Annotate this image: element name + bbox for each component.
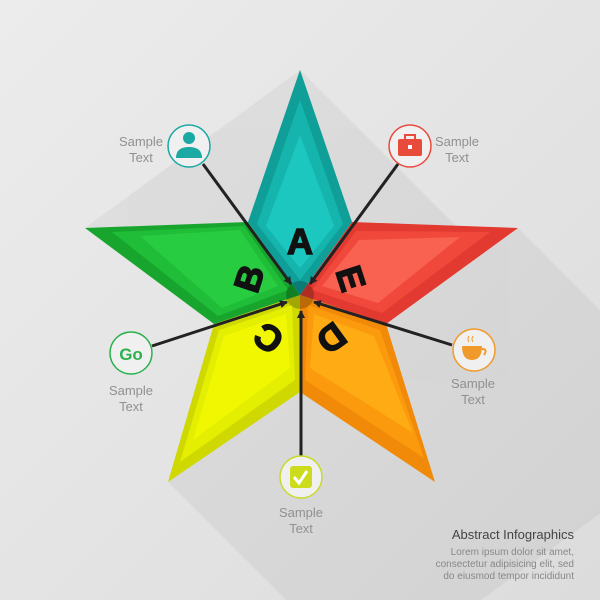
arrows [152,164,452,456]
labels: Sample [109,383,153,398]
icon: go: Go [119,345,143,364]
labels [109,134,495,536]
labels: Sample [451,376,495,391]
labels: Text [445,150,469,165]
icon: check [280,456,322,498]
icon: go [110,332,152,374]
letters: B [226,260,273,297]
labels: Sample [119,134,163,149]
arm B green [85,222,300,324]
letters: E [328,261,374,296]
labels: Text [129,150,153,165]
center circle [286,281,314,309]
arm C yellow [168,295,300,482]
labels: Sample [435,134,479,149]
labels: Text [289,521,313,536]
labels: Sample [279,505,323,520]
icon: briefcase [389,125,431,167]
letters [226,221,374,363]
footer text block: do eiusmod tempor incididunt [443,571,574,582]
arm E red [300,222,518,324]
letters: C [246,314,291,363]
star [85,70,518,482]
letters: A [287,221,313,262]
arm A teal [248,70,352,295]
footer text block: consectetur adipisicing elit, sed [436,559,574,570]
arm D orange [300,295,435,482]
labels: Text [119,399,143,414]
long shadow [85,70,600,600]
letters: D [309,314,354,363]
icon: cup [453,329,495,371]
footer text block [436,527,574,582]
labels: Text [461,392,485,407]
icon: person [168,125,210,167]
footer text block: Lorem ipsum dolor sit amet, [451,547,574,558]
footer text block: Abstract Infographics [452,527,574,542]
